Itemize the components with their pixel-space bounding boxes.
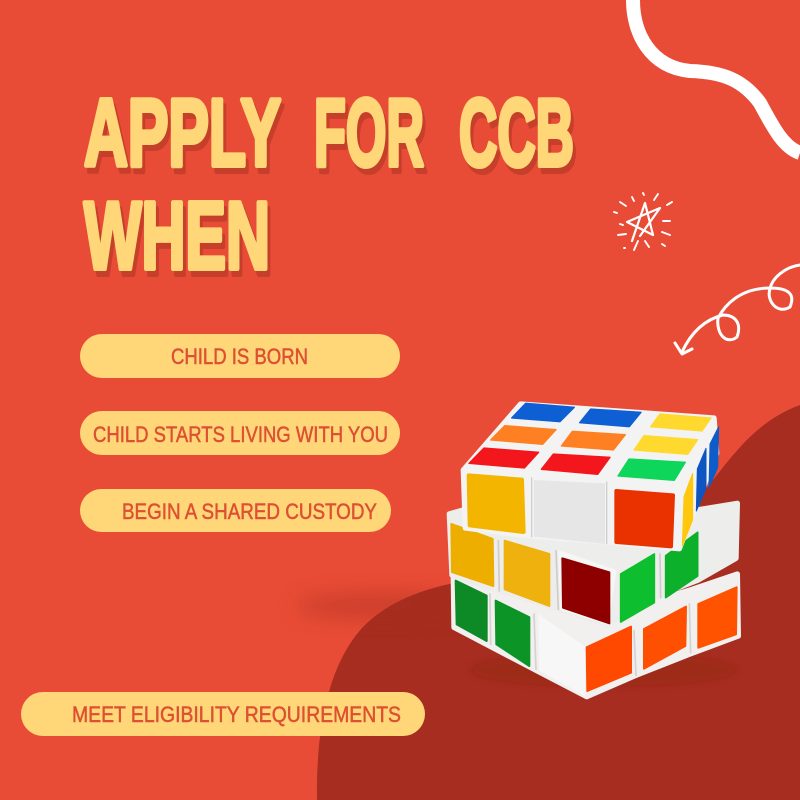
title: apply for ccb when bbox=[84, 80, 577, 296]
middle layer bbox=[449, 503, 737, 625]
icon: rubik's cube bbox=[449, 403, 738, 697]
pill: meet eligibility requirements bbox=[21, 692, 425, 736]
title text: APPLY bbox=[84, 80, 281, 186]
squiggle line bbox=[633, 0, 800, 153]
title text: WHEN bbox=[84, 182, 270, 290]
pill: child is born bbox=[80, 334, 400, 378]
pill: begin a shared custody: BEGIN A SHARED CUSTODY bbox=[122, 499, 377, 524]
icon: star doodle bbox=[614, 193, 672, 250]
title shadow: CCB bbox=[462, 86, 577, 192]
top layer bbox=[463, 403, 719, 549]
pill: meet eligibility requirements: MEET ELIGIBILITY REQUIREMENTS bbox=[72, 702, 401, 727]
title shadow bbox=[87, 86, 577, 296]
title shadow: APPLY bbox=[87, 86, 284, 192]
pill: begin a shared custody bbox=[80, 489, 391, 532]
dark background blob bbox=[317, 405, 800, 800]
title text bbox=[84, 80, 574, 290]
cube shadow bbox=[295, 591, 475, 621]
arrow: curly arrow bbox=[675, 265, 800, 354]
pill: child starts living with you bbox=[80, 411, 400, 455]
title text: FOR bbox=[314, 80, 424, 186]
cube contact shadow bbox=[470, 653, 737, 687]
pill: child is born: CHILD IS BORN bbox=[171, 344, 308, 369]
title shadow: FOR bbox=[317, 86, 427, 192]
bottom layer bbox=[453, 574, 738, 697]
title shadow: WHEN bbox=[87, 188, 273, 296]
pill: child starts living with you: CHILD STARTS LIVING WITH YOU bbox=[93, 422, 388, 447]
title text: CCB bbox=[459, 80, 574, 186]
